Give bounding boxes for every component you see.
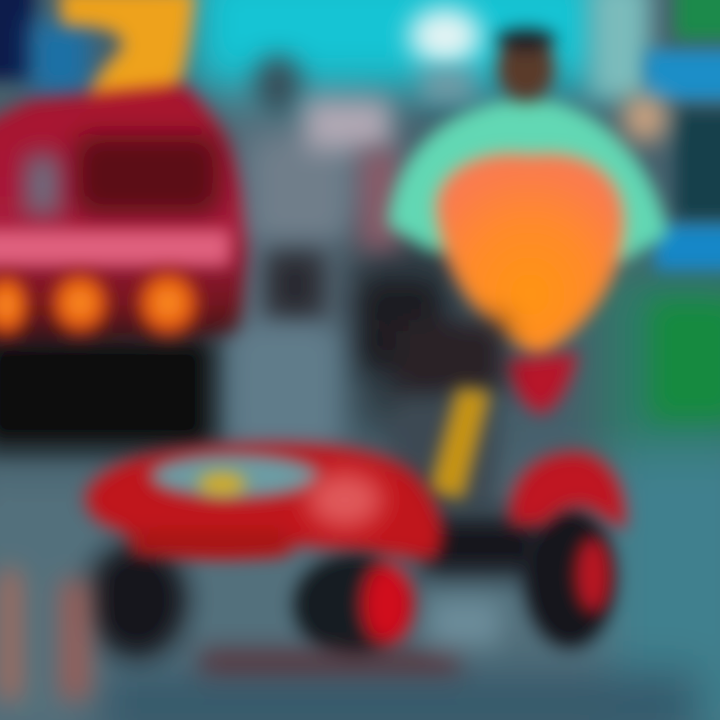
right side background blocks: [590, 0, 720, 420]
scooter right wheel: [509, 452, 626, 648]
top left dark corner and yellow figure: [0, 0, 195, 115]
rider: [388, 28, 668, 260]
orange heart shaped seat back: [436, 153, 624, 414]
ground reflections: [0, 570, 500, 700]
vehicle lamps: [0, 269, 200, 337]
background figures: [235, 8, 481, 450]
rider head: [496, 28, 556, 102]
yellow scooter column: [390, 320, 505, 510]
red vehicle: [0, 85, 248, 450]
scooter front body: [85, 443, 442, 658]
scooter middle wheel: [293, 553, 417, 657]
scooter base shadow: [420, 515, 540, 575]
